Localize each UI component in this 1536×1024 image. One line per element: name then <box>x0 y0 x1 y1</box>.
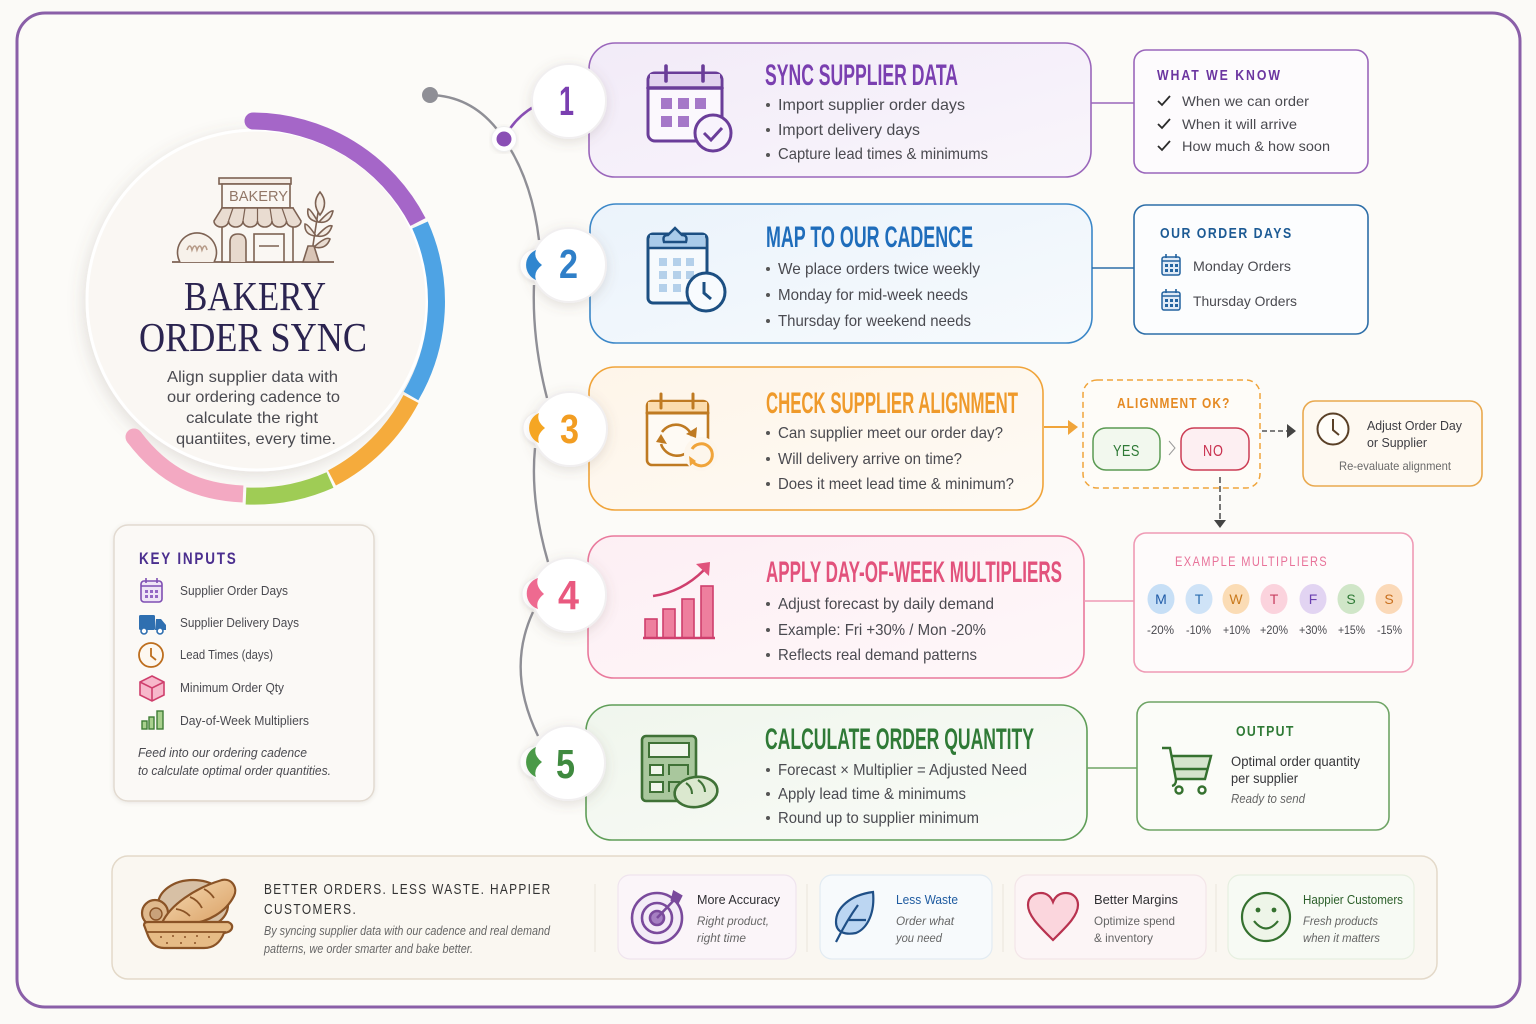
label: monday orders: Monday Orders <box>1193 258 1291 274</box>
step 1 badge <box>532 64 606 138</box>
tagline: BETTER ORDERS. LESS WASTE. HAPPIER <box>264 881 550 897</box>
start node <box>422 87 438 103</box>
note <box>138 746 331 778</box>
card 5: calculate order quantity <box>586 705 1087 840</box>
day circles: S <box>1384 591 1394 607</box>
day circles: F <box>1309 591 1317 607</box>
bullet list: Adjust forecast by daily demand <box>778 596 994 613</box>
bullet list: Example: Fri +30% / Mon -20% <box>778 622 986 639</box>
bullet list: Round up to supplier minimum <box>778 810 979 827</box>
hub: bakery order sync circle <box>87 112 436 496</box>
bullet list: Monday for mid-week needs <box>778 287 968 304</box>
arrow: no to multipliers <box>1214 477 1226 528</box>
check list: When we can order <box>1182 93 1309 109</box>
bullet list: Can supplier meet our order day? <box>778 425 1003 442</box>
text: & inventory <box>1094 931 1153 945</box>
text: you need <box>895 931 942 945</box>
heading: CHECK SUPPLIER ALIGNMENT <box>766 387 1018 420</box>
adjust text: or Supplier <box>1367 435 1428 450</box>
icon: leaf <box>836 892 873 942</box>
bullet list: Import supplier order days <box>778 97 965 114</box>
day percentages: +20% <box>1260 623 1288 637</box>
hub disc <box>87 130 427 470</box>
output text: per supplier <box>1231 771 1298 786</box>
card 3: check supplier alignment <box>589 367 1043 510</box>
panel: alignment ok decision <box>1083 380 1260 488</box>
arrow: card 3 to alignment check <box>1044 420 1078 435</box>
connector: card 4 to multipliers <box>1084 600 1134 602</box>
text <box>895 892 958 945</box>
icon: heart <box>1028 893 1078 940</box>
output text <box>1231 754 1360 806</box>
tagline: By syncing supplier data with our cadence and real demand <box>264 924 551 938</box>
note: Feed into our ordering cadence <box>138 746 307 760</box>
text: Right product, <box>697 914 769 928</box>
benefit: happier customers <box>1228 875 1414 959</box>
icon: clock <box>139 643 163 667</box>
heading: OUR ORDER DAYS <box>1160 225 1291 241</box>
bullet list: Apply lead time & minimums <box>778 786 966 803</box>
bullet list: Reflects real demand patterns <box>778 647 977 664</box>
title: BAKERY <box>184 273 326 319</box>
text: Less Waste <box>896 892 958 907</box>
icon: calendar with check <box>648 66 731 151</box>
step 4 badge <box>522 558 606 632</box>
text <box>1094 892 1178 945</box>
bullet list <box>766 261 980 330</box>
heading: SYNC SUPPLIER DATA <box>765 59 958 92</box>
adjust text <box>1339 418 1462 473</box>
step 2 badge <box>520 228 606 302</box>
icon: bread basket <box>142 880 235 948</box>
panel: bottom benefits band <box>112 856 1437 979</box>
panel: output <box>1137 702 1389 830</box>
icon: bars <box>142 711 163 729</box>
no button <box>1181 428 1249 470</box>
check list: How much & how soon <box>1182 138 1330 154</box>
bullet list: Thursday for weekend needs <box>778 313 971 330</box>
day circles: T <box>1270 591 1279 607</box>
step 4 badge: 4 <box>558 572 579 618</box>
icon: clipboard calendar with clock <box>648 228 725 311</box>
adjust text: Adjust Order Day <box>1367 418 1462 433</box>
bullet list: We place orders twice weekly <box>778 261 980 278</box>
no button: NO <box>1203 443 1223 460</box>
card 4: apply day-of-week multipliers <box>588 536 1084 678</box>
text: Better Margins <box>1094 892 1178 907</box>
panel: key inputs <box>114 525 374 801</box>
tagline: patterns, we order smarter and bake better. <box>263 942 473 956</box>
description: our ordering cadence to <box>167 389 340 406</box>
connector: card 5 to output <box>1087 767 1137 769</box>
note: to calculate optimal order quantities. <box>138 764 331 778</box>
description: calculate the right <box>186 410 319 427</box>
day circles: M <box>1155 591 1167 607</box>
step 5 badge: 5 <box>556 741 575 787</box>
day circles: T <box>1195 591 1204 607</box>
text: when it matters <box>1303 931 1380 945</box>
bullet list <box>766 97 988 163</box>
text: More Accuracy <box>697 892 780 907</box>
title <box>139 273 367 360</box>
label: minimum order qty: Minimum Order Qty <box>180 681 285 695</box>
connector: card 2 to order days <box>1092 267 1134 269</box>
panel: our order days <box>1134 205 1368 334</box>
check list: When it will arrive <box>1182 116 1297 132</box>
text <box>1303 892 1403 945</box>
bullet list: Forecast × Multiplier = Adjusted Need <box>778 762 1027 779</box>
benefit: more accuracy <box>618 875 796 959</box>
timeline path <box>422 87 548 736</box>
day circles <box>1148 584 1402 614</box>
icon: calendar monday <box>1162 254 1180 275</box>
shop sign text: BAKERY <box>229 188 288 205</box>
step 2 badge: 2 <box>559 241 578 287</box>
heading: EXAMPLE MULTIPLIERS <box>1175 554 1327 569</box>
step 3 badge <box>523 392 607 466</box>
check list <box>1158 93 1330 154</box>
bullet list: Will delivery arrive on time? <box>778 451 962 468</box>
icon: truck <box>139 615 166 634</box>
text: Happier Customers <box>1303 892 1403 907</box>
icon: calculator with bread <box>642 736 719 810</box>
step 5 badge <box>520 726 605 800</box>
benefit: better margins <box>1015 875 1206 959</box>
link to step 1 <box>504 106 535 139</box>
icon: calendar <box>141 578 162 602</box>
icon: calendar thursday <box>1162 289 1180 310</box>
label: supplier delivery days: Supplier Delivery Days <box>180 616 299 630</box>
benefit: less waste <box>820 875 992 959</box>
tagline <box>263 881 551 956</box>
step 1 badge: 1 <box>559 78 574 124</box>
text <box>697 892 780 945</box>
connector: card 1 to what we know <box>1091 102 1134 104</box>
day percentages: +10% <box>1223 623 1250 637</box>
text: Fresh products <box>1303 914 1378 928</box>
output text: Ready to send <box>1231 792 1306 806</box>
panel: what we know <box>1134 50 1368 173</box>
step 3 badge: 3 <box>560 406 579 452</box>
bullet list: Capture lead times & minimums <box>778 146 988 163</box>
bullet list <box>766 596 994 664</box>
label: supplier order days: Supplier Order Days <box>180 584 288 598</box>
day percentages: -15% <box>1377 623 1402 637</box>
icon: target <box>632 892 682 943</box>
icon: cart <box>1162 748 1211 794</box>
chevron <box>1169 441 1175 455</box>
heading: CALCULATE ORDER QUANTITY <box>765 723 1034 756</box>
bullet list: Import delivery days <box>778 122 920 139</box>
icon: clock <box>1318 414 1348 444</box>
panel: example multipliers <box>1134 533 1413 672</box>
text: right time <box>697 931 746 945</box>
bullet list <box>766 425 1014 493</box>
progress ring <box>126 112 436 496</box>
day percentages: -20% <box>1147 623 1174 637</box>
heading: ALIGNMENT OK? <box>1117 395 1229 411</box>
icon: smiley <box>1242 893 1290 941</box>
day percentages: +30% <box>1299 623 1327 637</box>
bullet list: Does it meet lead time & minimum? <box>778 476 1014 493</box>
description: quantiites, every time. <box>176 431 336 448</box>
day circles: S <box>1346 591 1356 607</box>
label: thursday orders: Thursday Orders <box>1193 293 1297 309</box>
title: ORDER SYNC <box>139 314 367 360</box>
description: Align supplier data with <box>167 369 338 386</box>
day percentages: +15% <box>1338 623 1365 637</box>
description <box>167 369 340 448</box>
icon: calendar with sync <box>647 394 718 471</box>
label: lead times: Lead Times (days) <box>180 648 273 662</box>
icon: bakery storefront <box>172 178 334 262</box>
output text: Optimal order quantity <box>1231 754 1360 769</box>
text: Order what <box>896 914 955 928</box>
yes button <box>1093 428 1160 470</box>
text: Optimize spend <box>1094 914 1175 928</box>
tagline: CUSTOMERS. <box>264 901 356 917</box>
heading: key inputs: KEY INPUTS <box>139 550 236 568</box>
icon: box <box>140 676 164 701</box>
card 2: map to our cadence <box>590 204 1092 343</box>
adjust text: Re-evaluate alignment <box>1339 459 1452 473</box>
label: day-of-week multipliers: Day-of-Week Multipliers <box>180 714 309 728</box>
heading: OUTPUT <box>1236 723 1294 739</box>
day circles: W <box>1229 591 1243 607</box>
node: step 1 <box>492 126 516 152</box>
heading: WHAT WE KNOW <box>1157 67 1280 83</box>
icon: rising bars <box>643 562 715 638</box>
heading: APPLY DAY-OF-WEEK MULTIPLIERS <box>766 556 1062 589</box>
yes button: YES <box>1113 443 1139 460</box>
panel: adjust order day <box>1303 401 1482 486</box>
card 1: sync supplier data <box>589 43 1091 177</box>
bullet list <box>766 762 1027 827</box>
day percentages <box>1147 623 1402 637</box>
day percentages: -10% <box>1186 623 1211 637</box>
arrow: no to adjust <box>1262 424 1296 438</box>
heading: MAP TO OUR CADENCE <box>766 221 973 254</box>
